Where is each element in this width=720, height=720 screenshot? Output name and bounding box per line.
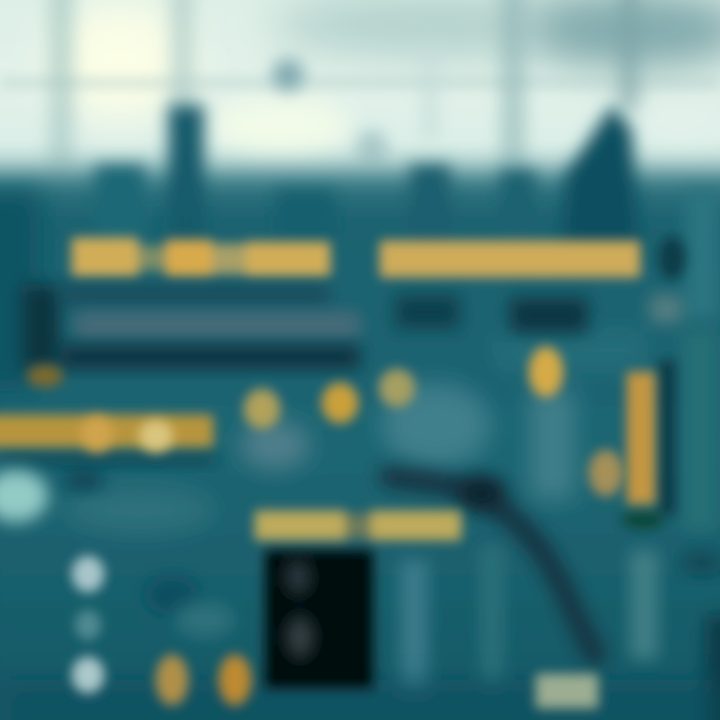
heading: right yellow bar <box>380 241 640 277</box>
dark curved path <box>390 475 595 655</box>
list icons <box>72 556 104 693</box>
orange bottom markers <box>156 655 251 705</box>
yellow step markers <box>244 347 563 429</box>
small sky circles <box>272 59 388 166</box>
pale bottom right block <box>536 674 598 708</box>
left orange banner <box>0 415 215 466</box>
heading: left yellow bar <box>72 238 330 276</box>
subtitle dark band <box>22 285 682 370</box>
dark spot beside heading <box>658 236 686 280</box>
pale teal blob <box>0 470 48 522</box>
lower city background <box>0 172 720 720</box>
skyline towers <box>95 105 640 260</box>
window frame streaks in sky <box>48 0 640 170</box>
black panel <box>265 550 373 688</box>
sky background <box>0 0 720 195</box>
tall orange shape on right <box>589 360 676 530</box>
dark spot near blob <box>64 470 104 490</box>
middle heading bar <box>255 511 461 540</box>
small orange marker <box>27 365 63 387</box>
